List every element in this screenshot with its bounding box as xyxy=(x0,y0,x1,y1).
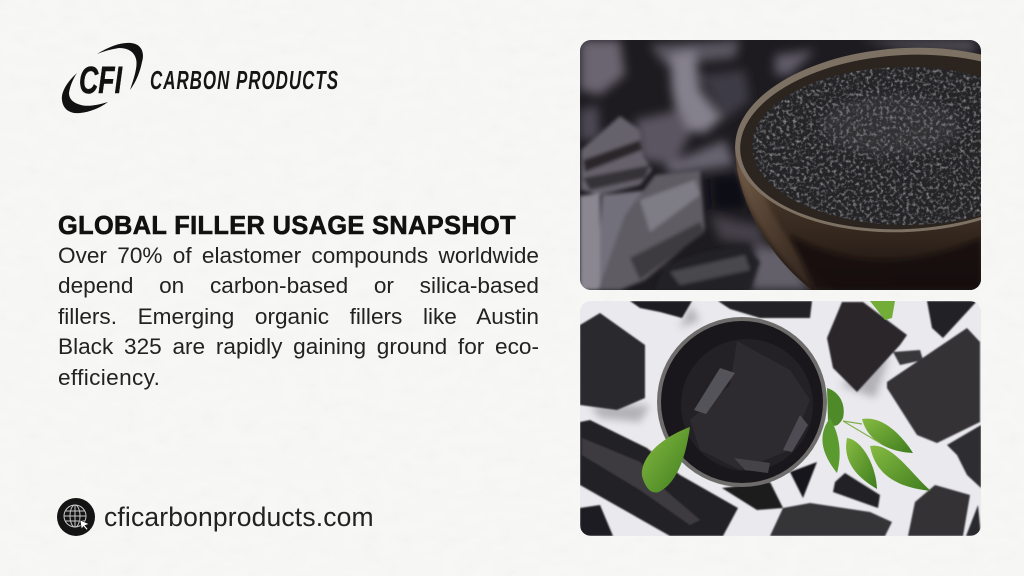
icon: swoosh mark xyxy=(62,43,143,113)
text block: description: Over 70% of elastomer compounds worldwide xyxy=(58,243,539,268)
text block: description: fillers. Emerging organic fillers like Austin xyxy=(58,304,539,329)
small bowl xyxy=(657,317,827,487)
blurred charcoal backdrop xyxy=(580,40,975,290)
charcoal top pieces xyxy=(630,301,692,318)
text block: description: depend on carbon-based or silica-based xyxy=(58,273,539,298)
lower pieces xyxy=(722,482,783,510)
logo: CFI Carbon Products xyxy=(62,42,339,114)
leaves xyxy=(642,427,690,492)
website url: cficarbonproducts.com xyxy=(104,502,374,532)
heading: GLOBAL FILLER USAGE SNAPSHOT xyxy=(58,212,516,240)
bowl xyxy=(735,145,981,290)
text block: description: efficiency. xyxy=(58,365,160,390)
bowl rim xyxy=(735,48,981,232)
text block: description: Black 325 are rapidly gaining ground for eco- xyxy=(58,334,539,359)
icon: globe with cursor xyxy=(57,498,95,536)
log bottom left xyxy=(580,420,738,536)
foreground charcoal chunks xyxy=(580,116,760,290)
photo: charcoal powder in wooden bowl xyxy=(580,40,981,290)
text block: description xyxy=(58,243,539,390)
photo: charcoal chunks, bowl and green leaves xyxy=(580,301,981,536)
powder xyxy=(752,67,980,221)
shadows xyxy=(590,305,890,422)
logo initials: CFI xyxy=(79,60,123,102)
